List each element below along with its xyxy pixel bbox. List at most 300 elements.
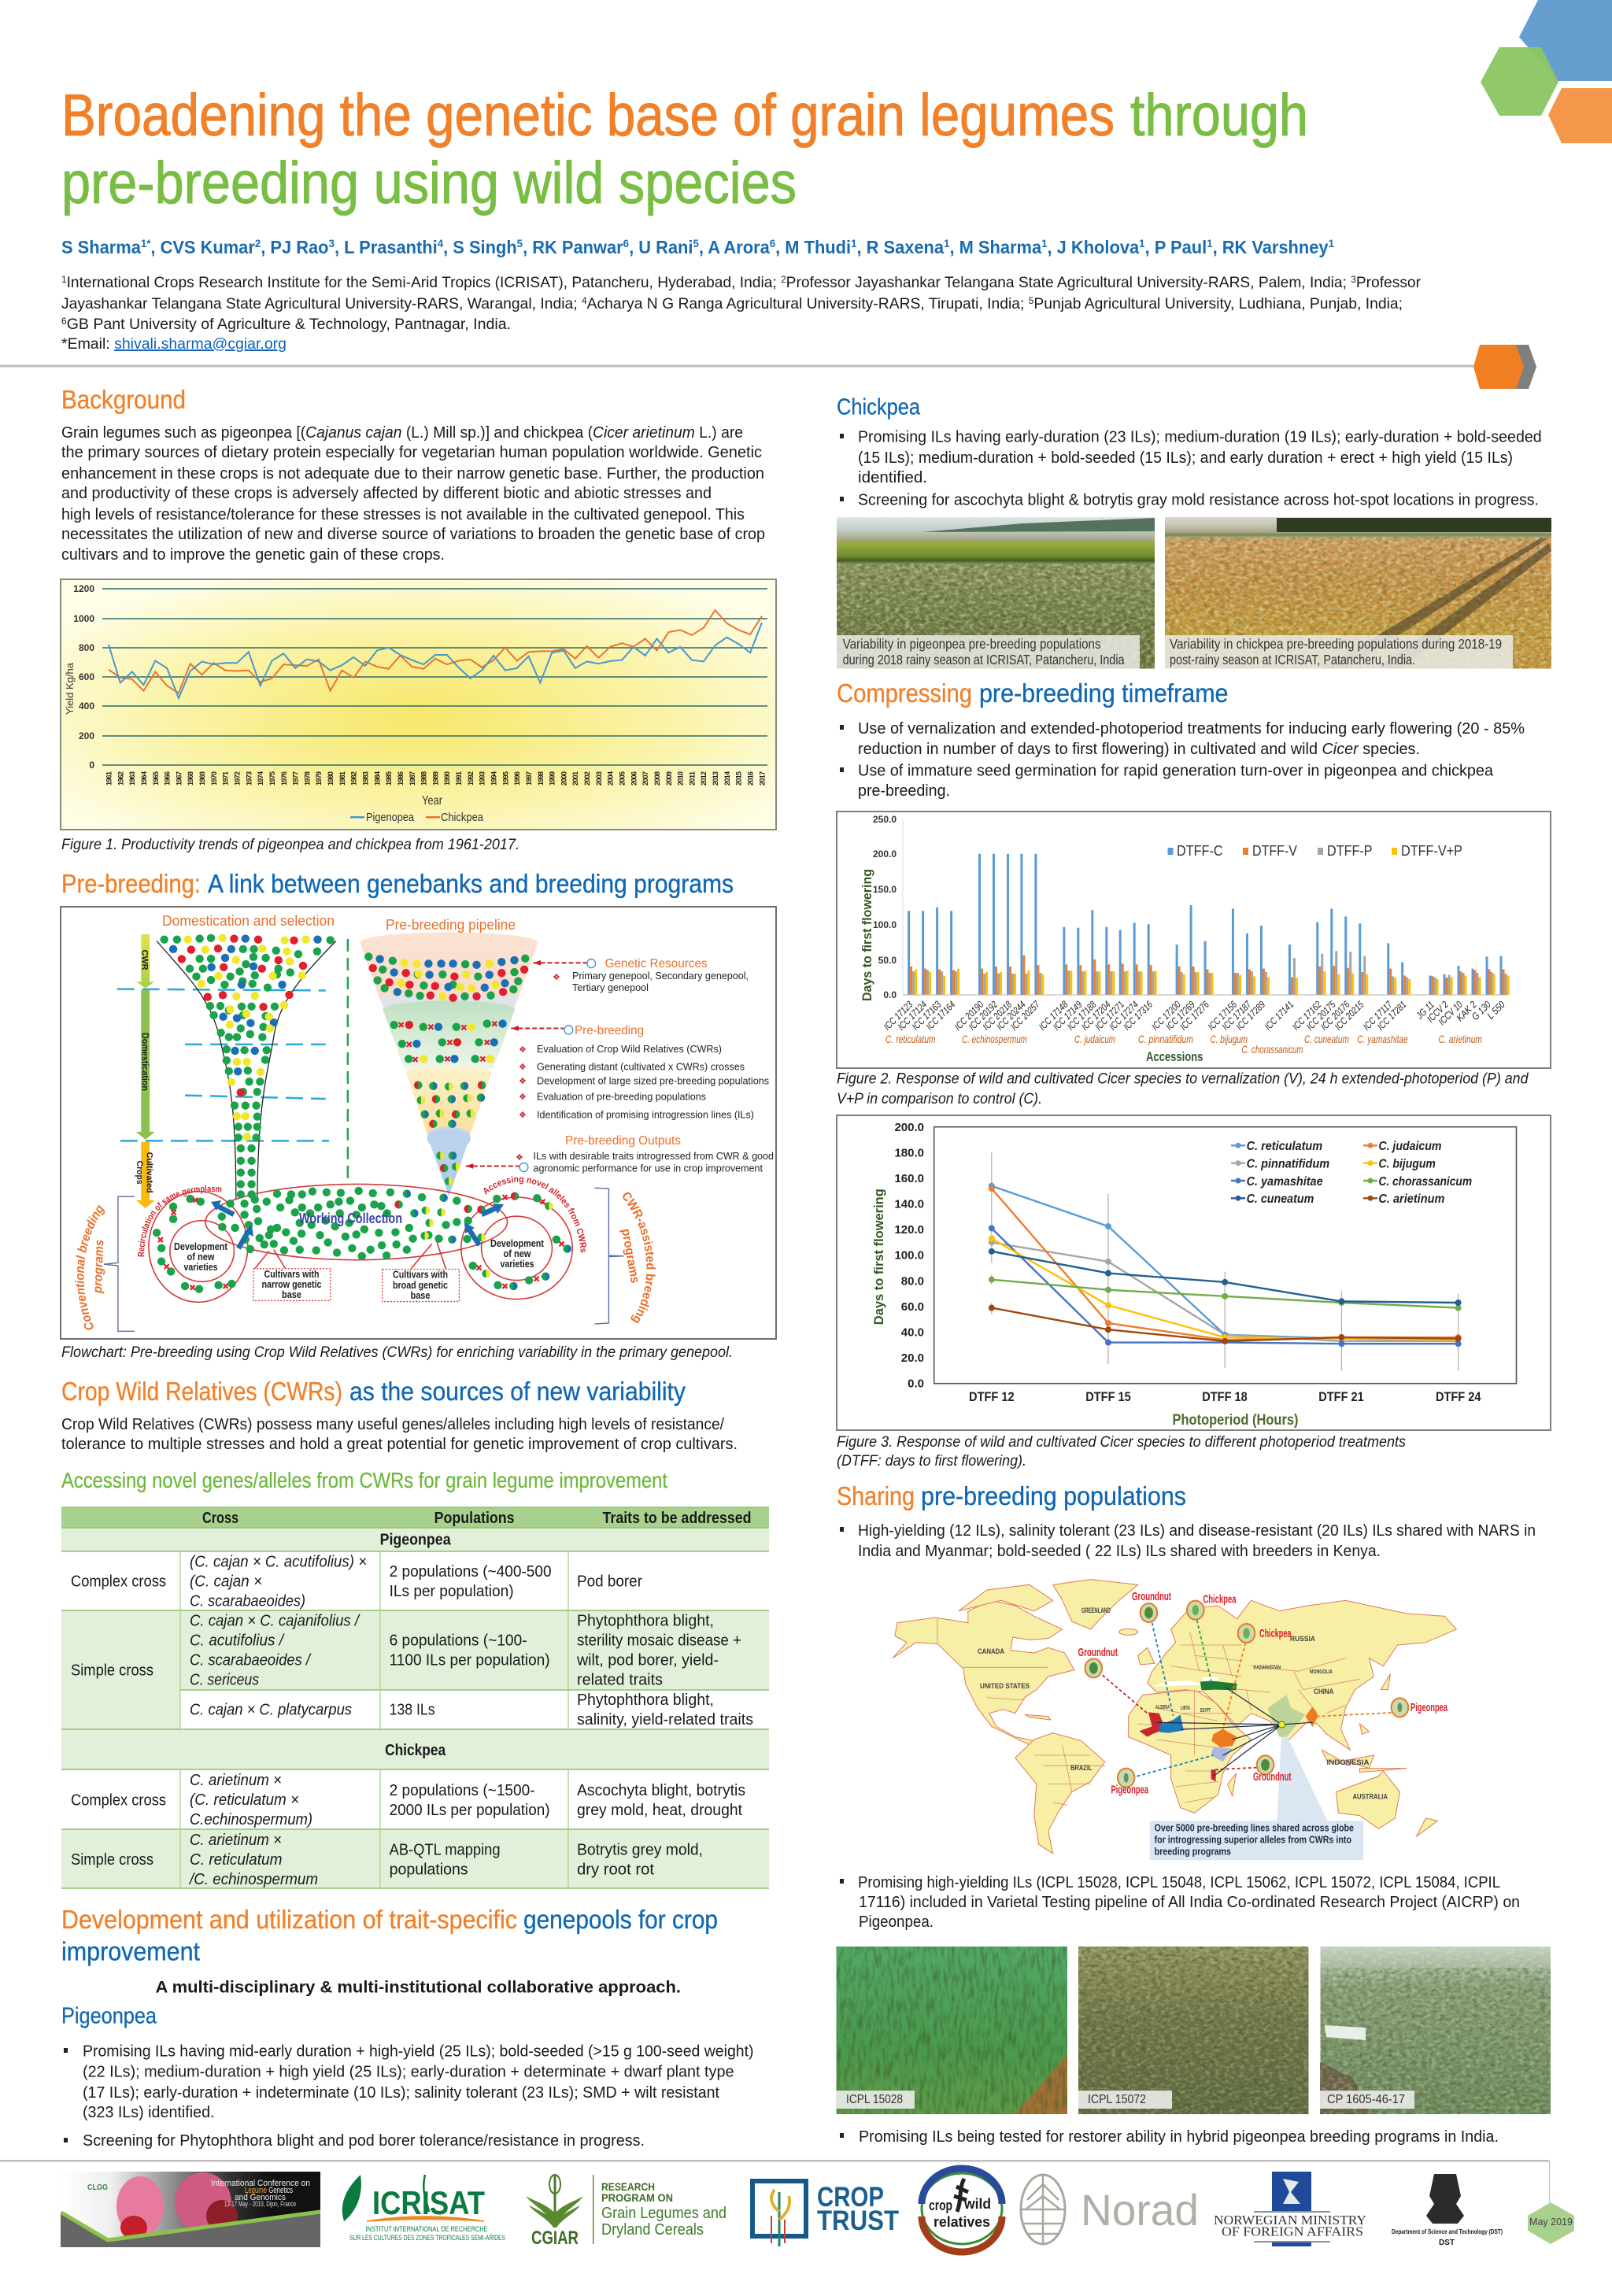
pigeonpea line — [109, 623, 762, 698]
table column 3 populations: 2000 ILs per population) — [390, 1802, 550, 1819]
pre-breeding outputs text: Pre-breeding Outputs — [565, 1134, 681, 1148]
flowchart section titles — [162, 913, 516, 933]
year labels: 2006 — [630, 771, 638, 786]
country labels: INDONESIA — [1327, 1758, 1370, 1766]
table column 3 populations: ILs per population) — [390, 1583, 514, 1600]
cultivar box labels: broad genetic — [393, 1280, 448, 1291]
genetic resources text: Genetic Resources — [605, 957, 708, 971]
heading: compressing timeframe: pre-breeding timeframe — [979, 678, 1228, 708]
heading: compressing timeframe: Compressing — [837, 678, 972, 708]
logo: Norwegian Ministry of Foreign Affairs: NORWEGIAN MINISTRY — [1214, 2213, 1366, 2228]
year labels: 1995 — [501, 771, 509, 786]
bullets: chickpea: Screening for ascochyta blight & botrytis gray mold resistance across hot-spot locations in progress. — [858, 491, 1539, 508]
year labels: 1974 — [257, 771, 264, 786]
photo: ICPL 15072 — [1078, 1947, 1308, 2114]
year labels: 1997 — [525, 771, 533, 786]
year labels: 1985 — [385, 771, 393, 786]
x axis title: Photoperiod (Hours) — [1173, 1412, 1299, 1429]
map callout text — [1155, 1822, 1354, 1858]
accession labels: KAK 2 — [1455, 999, 1479, 1023]
accession labels: ICC 17289 — [1234, 999, 1267, 1033]
heading: crop wild relatives: Crop Wild Relatives (CWRs) — [61, 1377, 342, 1406]
accession labels: ICC 20257 — [1008, 999, 1042, 1033]
curved loop labels: programs — [619, 1228, 641, 1285]
photo: pigeonpea field — [837, 517, 1155, 669]
table column 4 traits: Phytophthora blight, — [577, 1691, 714, 1709]
year labels: 1986 — [397, 771, 405, 786]
accession labels: ICC 20244 — [994, 999, 1028, 1033]
accession labels — [882, 999, 1507, 1033]
authors: , PJ Rao — [261, 237, 329, 257]
species labels: C. bijugum — [1211, 1033, 1248, 1045]
year labels: 2002 — [583, 771, 591, 786]
table column 3 populations: 6 populations (~100- — [390, 1632, 527, 1650]
logo: ICRISAT: SUR LES CULTURES DES ZONES TROPICALES SEMI-ARIDES — [349, 2234, 505, 2242]
accession labels: ICC 17163 — [910, 999, 943, 1033]
text: background paragraph: cultivars and to improve the genetic gain of these crops. — [61, 546, 445, 564]
country labels: LIBYA — [1181, 1706, 1190, 1711]
subheading: accessing novel genes: Accessing novel genes/alleles from CWRs for grain legume improvement — [61, 1468, 667, 1492]
map callout text: breeding programs — [1155, 1846, 1231, 1858]
accession labels: ICC 17124 — [896, 999, 929, 1033]
year labels: 1969 — [198, 771, 206, 786]
species labels: C. judaicum — [1074, 1033, 1115, 1045]
domestication arrows — [136, 934, 155, 1208]
table column 3 populations: 2 populations (~400-500 — [390, 1563, 552, 1581]
x axis labels: DTFF 18 — [1202, 1389, 1248, 1404]
affiliations: GB Pant University of Agriculture & Technology, Pantnagar, India. — [67, 316, 511, 333]
table column 4 traits: Phytophthora blight, — [577, 1613, 714, 1630]
year labels: 1977 — [292, 771, 300, 786]
table column 3 populations: 2 populations (~1500- — [390, 1782, 535, 1799]
conference text: International Conference on — [211, 2179, 310, 2188]
accession labels: ICC 20215 — [1333, 999, 1366, 1033]
table column 4 traits: Pod borer — [577, 1573, 642, 1591]
affiliations: 5 — [1029, 295, 1034, 306]
authors: , J Kholova — [1048, 237, 1139, 257]
y axis labels: 200.0 — [873, 849, 897, 860]
development of new varieties labels: varieties — [184, 1262, 218, 1273]
flowchart artwork — [104, 932, 624, 1331]
year labels: 1987 — [409, 771, 416, 786]
flowchart section titles: Pre-breeding pipeline — [386, 917, 516, 933]
left funnel outline — [157, 941, 336, 1200]
text: background paragraph: the primary sources of dietary protein especially for vegetarian human population worldwide. Genetic — [61, 444, 762, 461]
accession labels: ICC 17162 — [1290, 999, 1324, 1033]
table column 4 traits — [576, 1573, 753, 1879]
legend: C. reticulatum — [1247, 1140, 1322, 1153]
date hexagon: May 2019 — [1529, 2217, 1573, 2228]
table column 1: Complex cross — [71, 1791, 166, 1809]
logo: CGIAR grain legumes: Grain Legumes and — [601, 2205, 727, 2222]
title: through — [1130, 82, 1308, 148]
dashed pointers — [466, 963, 587, 1166]
country labels: EGYPT — [1200, 1708, 1211, 1714]
seed dots — [153, 934, 571, 1293]
y axis values: 0 — [89, 760, 94, 771]
development of new varieties labels: Development — [174, 1241, 228, 1252]
heading: pre-breeding: A link between genebanks and breeding programs — [208, 869, 734, 898]
accession labels: ICC 20190 — [952, 999, 985, 1033]
cultivar box labels: Cultivars with — [393, 1270, 448, 1281]
country borders — [937, 1618, 1359, 1805]
year labels: 1976 — [280, 771, 288, 786]
species labels: C. yamashitae — [1357, 1033, 1408, 1045]
country labels: GREENLAND — [1081, 1606, 1111, 1614]
year labels: 1978 — [303, 771, 311, 786]
year labels: 1972 — [233, 771, 241, 786]
caption: figure 1: Figure 1. Productivity trends of pigeonpea and chickpea from 1961-2017. — [61, 836, 519, 853]
heading: development and utilization: Development and utilization of trait-specific — [61, 1905, 517, 1934]
legend — [1168, 843, 1462, 859]
authors: 2 — [255, 237, 261, 250]
affiliations: 3 — [1351, 274, 1356, 285]
country labels: UNITED STATES — [980, 1682, 1030, 1690]
text: background paragraph: and productivity of these crops is adversely affected by different biotic and abiotic stresses and — [61, 485, 712, 502]
conference text: Legume Genetics — [245, 2186, 293, 2195]
year labels: 2014 — [723, 771, 731, 786]
year labels: 2000 — [560, 771, 568, 786]
table column 4 traits: salinity, yield-related traits — [577, 1711, 753, 1728]
year labels: 1970 — [210, 771, 218, 786]
table column 2 crosses: C.echinospermum) — [190, 1811, 312, 1828]
table header: Cross — [202, 1510, 238, 1527]
cultivar box labels: base — [411, 1290, 431, 1301]
table column 4 traits: Botrytis grey mold, — [577, 1842, 703, 1859]
table column 1: Simple cross — [71, 1662, 153, 1680]
conference text: and Genomics — [235, 2193, 286, 2202]
header divider with chevron — [0, 345, 1536, 389]
authors: , L Prasanthi — [335, 237, 438, 257]
table column 4 traits: Ascochyta blight, botrytis — [577, 1782, 745, 1799]
pre-breeding text: Generating distant (cultivated x CWRs) crosses — [537, 1060, 745, 1072]
table column 3 populations: 138 ILs — [390, 1702, 435, 1719]
year labels: 1961 — [105, 771, 113, 786]
year labels: 1989 — [431, 771, 439, 786]
species labels: C. cuneatum — [1304, 1033, 1349, 1045]
accession labels: ICC 17123 — [882, 999, 915, 1033]
logo: Norwegian Ministry of Foreign Affairs: OF FOREIGN AFFAIRS — [1222, 2224, 1363, 2239]
species labels: C. arietinum — [1439, 1033, 1482, 1045]
y axis labels — [873, 814, 897, 1000]
year labels — [105, 771, 766, 786]
caption: figure 2: V+P in comparison to control (C). — [837, 1090, 1042, 1107]
year labels: 2007 — [641, 771, 649, 786]
caption: figure 3 — [837, 1433, 1406, 1470]
map plant labels: Pigeonpea — [1410, 1701, 1447, 1714]
year labels: 2012 — [700, 771, 708, 786]
country labels — [978, 1606, 1388, 1801]
legend — [350, 811, 484, 824]
table column 2 crosses: C. cajan × C. platycarpus — [190, 1702, 352, 1719]
table column 2 crosses: (C. cajan × — [190, 1573, 262, 1591]
flowchart section titles: Domestication and selection — [162, 913, 335, 929]
year labels: 1988 — [420, 771, 428, 786]
accession labels: ICC 20175 — [1304, 999, 1338, 1033]
legend: C. bijugum — [1378, 1157, 1436, 1171]
photo label: ICPL 15028 — [846, 2093, 903, 2106]
accession labels: ICC 17281 — [1375, 999, 1409, 1033]
legend: DTFF-V — [1252, 843, 1297, 859]
decorative hexagons — [1481, 0, 1612, 143]
y axis values: 600 — [79, 671, 94, 682]
pre-breeding text: ❖ — [519, 1110, 527, 1120]
caption: flowchart: Flowchart: Pre-breeding using Crop Wild Relatives (CWRs) for enriching variability in the primary genepool. — [61, 1344, 733, 1361]
year labels: 1975 — [268, 771, 276, 786]
text: background paragraph: enhancement in these crops is not adequate due to their narrow genetic base. Further, the production — [61, 465, 764, 482]
x axis title: Accessions — [1146, 1049, 1203, 1064]
caption: figure 2: Figure 2. Response of wild and cultivated Cicer species to vernalization (V), 24 h extended-photoperiod (P) and — [837, 1070, 1529, 1088]
species labels — [885, 1033, 1482, 1056]
accession labels: ICC 17148 — [1037, 999, 1070, 1033]
accession labels: ICC 20218 — [981, 999, 1014, 1033]
bullets: compressing: Use of immature seed germination for rapid generation turn-over in pigeonpea and chickpea — [858, 762, 1494, 779]
logo: CGIAR grain legumes — [526, 2175, 727, 2249]
table column 2 crosses: (C. reticulatum × — [190, 1791, 299, 1809]
photo: chickpea field — [1165, 517, 1551, 669]
bullets: pigeonpea: Screening for Phytophthora blight and pod borer tolerance/resistance in progress. — [83, 2132, 645, 2150]
legend: C. yamashitae — [1247, 1175, 1323, 1189]
authors: 1 — [1207, 237, 1213, 250]
year labels: 1991 — [455, 771, 463, 786]
genetic resources text: Tertiary genepool — [572, 982, 649, 993]
photo label: CP 1605-46-17 — [1327, 2093, 1405, 2106]
year labels: 2011 — [688, 771, 696, 786]
table column 2 crosses: C. scarabaeoides / — [190, 1652, 312, 1669]
pre-breeding text: Development of large sized pre-breeding populations — [537, 1075, 769, 1086]
year labels: 1999 — [549, 771, 556, 786]
logo: CGIAR grain legumes: PROGRAM ON — [601, 2191, 673, 2204]
x axis labels: DTFF 21 — [1318, 1389, 1364, 1404]
year labels: 2001 — [571, 771, 579, 786]
y axis labels: 250.0 — [873, 814, 897, 825]
title: Broadening the genetic base of grain legumes — [61, 82, 1115, 148]
pre-breeding text: ❖ — [519, 1044, 527, 1055]
map plant labels: Groundnut — [1253, 1770, 1291, 1784]
table column 2 crosses: C. scarabaeoides) — [190, 1593, 305, 1610]
y axis labels: 20.0 — [901, 1351, 924, 1365]
accession labels: G 130 — [1470, 999, 1493, 1022]
map plant labels: Chickpea — [1259, 1627, 1292, 1640]
year labels: 1980 — [327, 771, 335, 786]
arrow labels: Cultivated — [145, 1152, 154, 1193]
accession labels: ICC 20192 — [967, 999, 1000, 1033]
authors: 5 — [517, 237, 523, 250]
logo: Crop Trust: CROP — [817, 2182, 884, 2213]
authors: 5 — [693, 237, 699, 250]
arrow labels — [135, 949, 154, 1193]
y axis title: Days to first flowering — [871, 1189, 886, 1325]
authors: , M Sharma — [949, 237, 1041, 257]
photo: ICPL 15028 — [836, 1947, 1067, 2114]
text: collaborative approach: A multi-disciplinary & multi-institutional collaborative approach. — [156, 1979, 681, 1997]
table column 2 crosses: C. cajan × C. cajanifolius / — [190, 1613, 360, 1630]
year labels: 1992 — [467, 771, 475, 786]
affiliations — [61, 274, 1421, 353]
logo: CGIAR grain legumes: RESEARCH — [601, 2180, 655, 2193]
bullets: high-yielding ILs: Pigeonpea. — [859, 1913, 934, 1931]
legend: C. chorassanicum — [1378, 1175, 1472, 1189]
table column 4 traits: wilt, pod borer, yield- — [576, 1652, 719, 1669]
logo: Crop Trust — [752, 2181, 899, 2246]
y axis labels: 60.0 — [901, 1300, 924, 1314]
y axis labels: 180.0 — [894, 1146, 924, 1159]
table column 3 populations: 1100 ILs per population) — [390, 1652, 550, 1669]
bullets: high-yielding ILs: 17116) included in Varietal Testing pipeline of All India Co-ordinated Research Project (AICRP) on — [859, 1894, 1520, 1911]
pre-breeding text — [519, 1024, 769, 1121]
year labels: 2008 — [653, 771, 661, 786]
year labels: 2015 — [735, 771, 743, 786]
text: background paragraph: necessitates the utilization of new and diverse source of variations to broaden the genetic base of crop — [61, 526, 765, 543]
logo: CGIAR grain legumes: Dryland Cereals — [601, 2221, 704, 2239]
table column 2 crosses: C. arietinum × — [190, 1772, 282, 1789]
table column 3 populations: AB-QTL mapping — [390, 1842, 501, 1859]
table column 4 traits: related traits — [577, 1672, 663, 1689]
legend: C. cuneatum — [1247, 1192, 1314, 1206]
bullets: pigeonpea: Promising ILs having mid-early duration + high-yield (25 ILs); bold-seeded (>15 g 100-seed weight) — [83, 2043, 754, 2061]
arrow labels: CWR — [140, 949, 150, 971]
bullets: pigeonpea: (323 ILs) identified. — [83, 2104, 214, 2121]
table column 2 crosses: C. reticulatum — [190, 1851, 282, 1869]
accession labels: ICC 17271 — [1093, 999, 1126, 1033]
sharing lines — [1103, 1620, 1392, 1777]
pre-breeding outputs text — [516, 1134, 774, 1174]
y axis labels: 40.0 — [901, 1325, 924, 1340]
heading: compressing timeframe — [837, 678, 1228, 708]
year labels: 1981 — [338, 771, 346, 786]
logo: ICRISAT — [342, 2175, 505, 2242]
year labels: 2003 — [595, 771, 603, 786]
accession labels: ICC 17274 — [1107, 999, 1141, 1033]
cultivar box labels: base — [282, 1289, 301, 1300]
table column 1 — [71, 1573, 166, 1869]
highlighted countries — [1139, 1680, 1318, 1781]
table header: Traits to be addressed — [603, 1510, 751, 1527]
y axis values: 200 — [79, 730, 94, 741]
logo: DST — [1392, 2174, 1503, 2247]
development of new varieties labels: of new — [187, 1252, 215, 1263]
country labels: AUSTRALIA — [1352, 1793, 1388, 1801]
bullets: compressing: reduction in number of days to first flowering) in cultivated and wild Cicer species. — [858, 741, 1420, 758]
table column 2 crosses: (C. cajan × C. acutifolius) × — [190, 1554, 367, 1571]
logo: Norad — [1021, 2175, 1199, 2244]
legend: Pigenopea — [366, 811, 415, 824]
logo: DST: DST — [1439, 2239, 1455, 2247]
accession labels: ICC 17316 — [1122, 999, 1155, 1033]
series lines and error bars — [989, 1152, 1462, 1370]
photo: CP 1605-46-17 — [1320, 1947, 1551, 2114]
genetic resources text: ❖ — [553, 972, 560, 982]
heading: sharing populations: Sharing — [837, 1481, 915, 1510]
authors: 1* — [141, 237, 151, 250]
y axis labels — [894, 1121, 924, 1391]
table column 1: Simple cross — [71, 1851, 153, 1869]
caption: figure 3: Figure 3. Response of wild and cultivated Cicer species to different photoperiod treatments — [837, 1433, 1406, 1451]
arrow labels: Crops — [135, 1161, 144, 1185]
y axis values — [73, 583, 94, 771]
photo caption: Variability in chickpea pre-breeding populations during 2018-19 — [1170, 636, 1502, 652]
authors: 1 — [944, 237, 950, 250]
authors: , M Thudi — [775, 237, 851, 257]
photo caption — [1170, 636, 1502, 667]
y axis labels: 160.0 — [894, 1172, 924, 1185]
authors: 6 — [623, 237, 629, 250]
photo caption: during 2018 rainy season at ICRISAT, Patancheru, India — [843, 652, 1125, 667]
table header: Populations — [434, 1510, 515, 1527]
year labels: 1979 — [315, 771, 323, 786]
breeding loops and working collection — [149, 1184, 572, 1302]
year labels: 2009 — [665, 771, 673, 786]
country labels: CHINA — [1314, 1688, 1334, 1695]
pre-breeding text: ❖ — [519, 1076, 527, 1086]
logo: ICRISAT: ICRISAT — [372, 2184, 485, 2221]
map plant labels — [1078, 1590, 1447, 1797]
year labels: 1962 — [116, 771, 124, 786]
country labels: MONGOLIA — [1310, 1669, 1333, 1675]
text: CWR paragraph — [61, 1416, 738, 1453]
table header: Chickpea — [385, 1742, 446, 1759]
panel: pre-breeding flowchart — [60, 906, 777, 1340]
table column 2 crosses: C. sericeus — [190, 1672, 259, 1689]
accession labels: ICC 17164 — [924, 999, 957, 1033]
year labels: 1966 — [164, 771, 172, 786]
heading: development and utilization: improvement — [61, 1937, 200, 1966]
logo: Crop Trust: TRUST — [817, 2205, 899, 2236]
species labels: C. chorassanicum — [1242, 1043, 1303, 1056]
map callout text: Over 5000 pre-breeding lines shared across globe — [1155, 1822, 1354, 1834]
development of new varieties labels — [174, 1238, 545, 1273]
genetic resources text — [553, 957, 749, 993]
table column 2 crosses — [188, 1554, 367, 1888]
year labels: 1968 — [187, 771, 194, 786]
species labels: C. pinnatifidum — [1138, 1033, 1193, 1045]
accession labels: ICCV 2 — [1425, 999, 1451, 1025]
cultivar box labels — [261, 1269, 448, 1301]
pre-breeding text: Pre-breeding — [575, 1024, 644, 1037]
affiliations: 6 — [61, 316, 67, 327]
curved loop labels: Conventional breeding — [75, 1204, 105, 1330]
affiliations: Professor — [1356, 274, 1421, 291]
map artwork — [893, 1580, 1456, 1860]
authors: , R Saxena — [857, 237, 944, 257]
table header: Pigeonpea — [380, 1532, 451, 1549]
bullets: sharing — [840, 1522, 1536, 1560]
table column 4 traits: sterility mosaic disease + — [577, 1632, 741, 1650]
legend: C. judaicum — [1378, 1140, 1441, 1153]
year labels: 2004 — [607, 771, 615, 786]
y axis labels: 50.0 — [878, 955, 897, 966]
photo caption: post-rainy season at ICRISAT, Patancheru, India. — [1170, 652, 1415, 667]
text: background paragraph — [61, 424, 765, 564]
conference text: CLGG — [87, 2183, 108, 2192]
bullets: chickpea — [840, 429, 1542, 508]
accession labels: JG 11 — [1414, 999, 1436, 1022]
footer divider — [0, 2160, 1550, 2202]
bullets: compressing: Use of vernalization and extended-photoperiod treatments for inducing early flowering (20 - 85% — [858, 720, 1525, 738]
table: crosses, populations and traits — [61, 1507, 769, 1888]
pipeline funnel cone — [360, 932, 538, 1196]
map plant labels: Groundnut — [1078, 1646, 1118, 1659]
y axis labels: 200.0 — [894, 1121, 924, 1134]
bullets: compressing: pre-breeding. — [858, 782, 950, 800]
accession labels: ICC 17117 — [1361, 999, 1395, 1033]
authors: 6 — [770, 237, 775, 250]
authors: 1 — [851, 237, 857, 250]
accession labels: ICC 17156 — [1206, 999, 1239, 1033]
bullets: chickpea: Promising ILs having early-duration (23 ILs); medium-duration (19 ILs); early-duration + bold-seeded — [858, 429, 1542, 446]
year labels: 1996 — [513, 771, 521, 786]
map plant labels: Chickpea — [1203, 1593, 1237, 1606]
